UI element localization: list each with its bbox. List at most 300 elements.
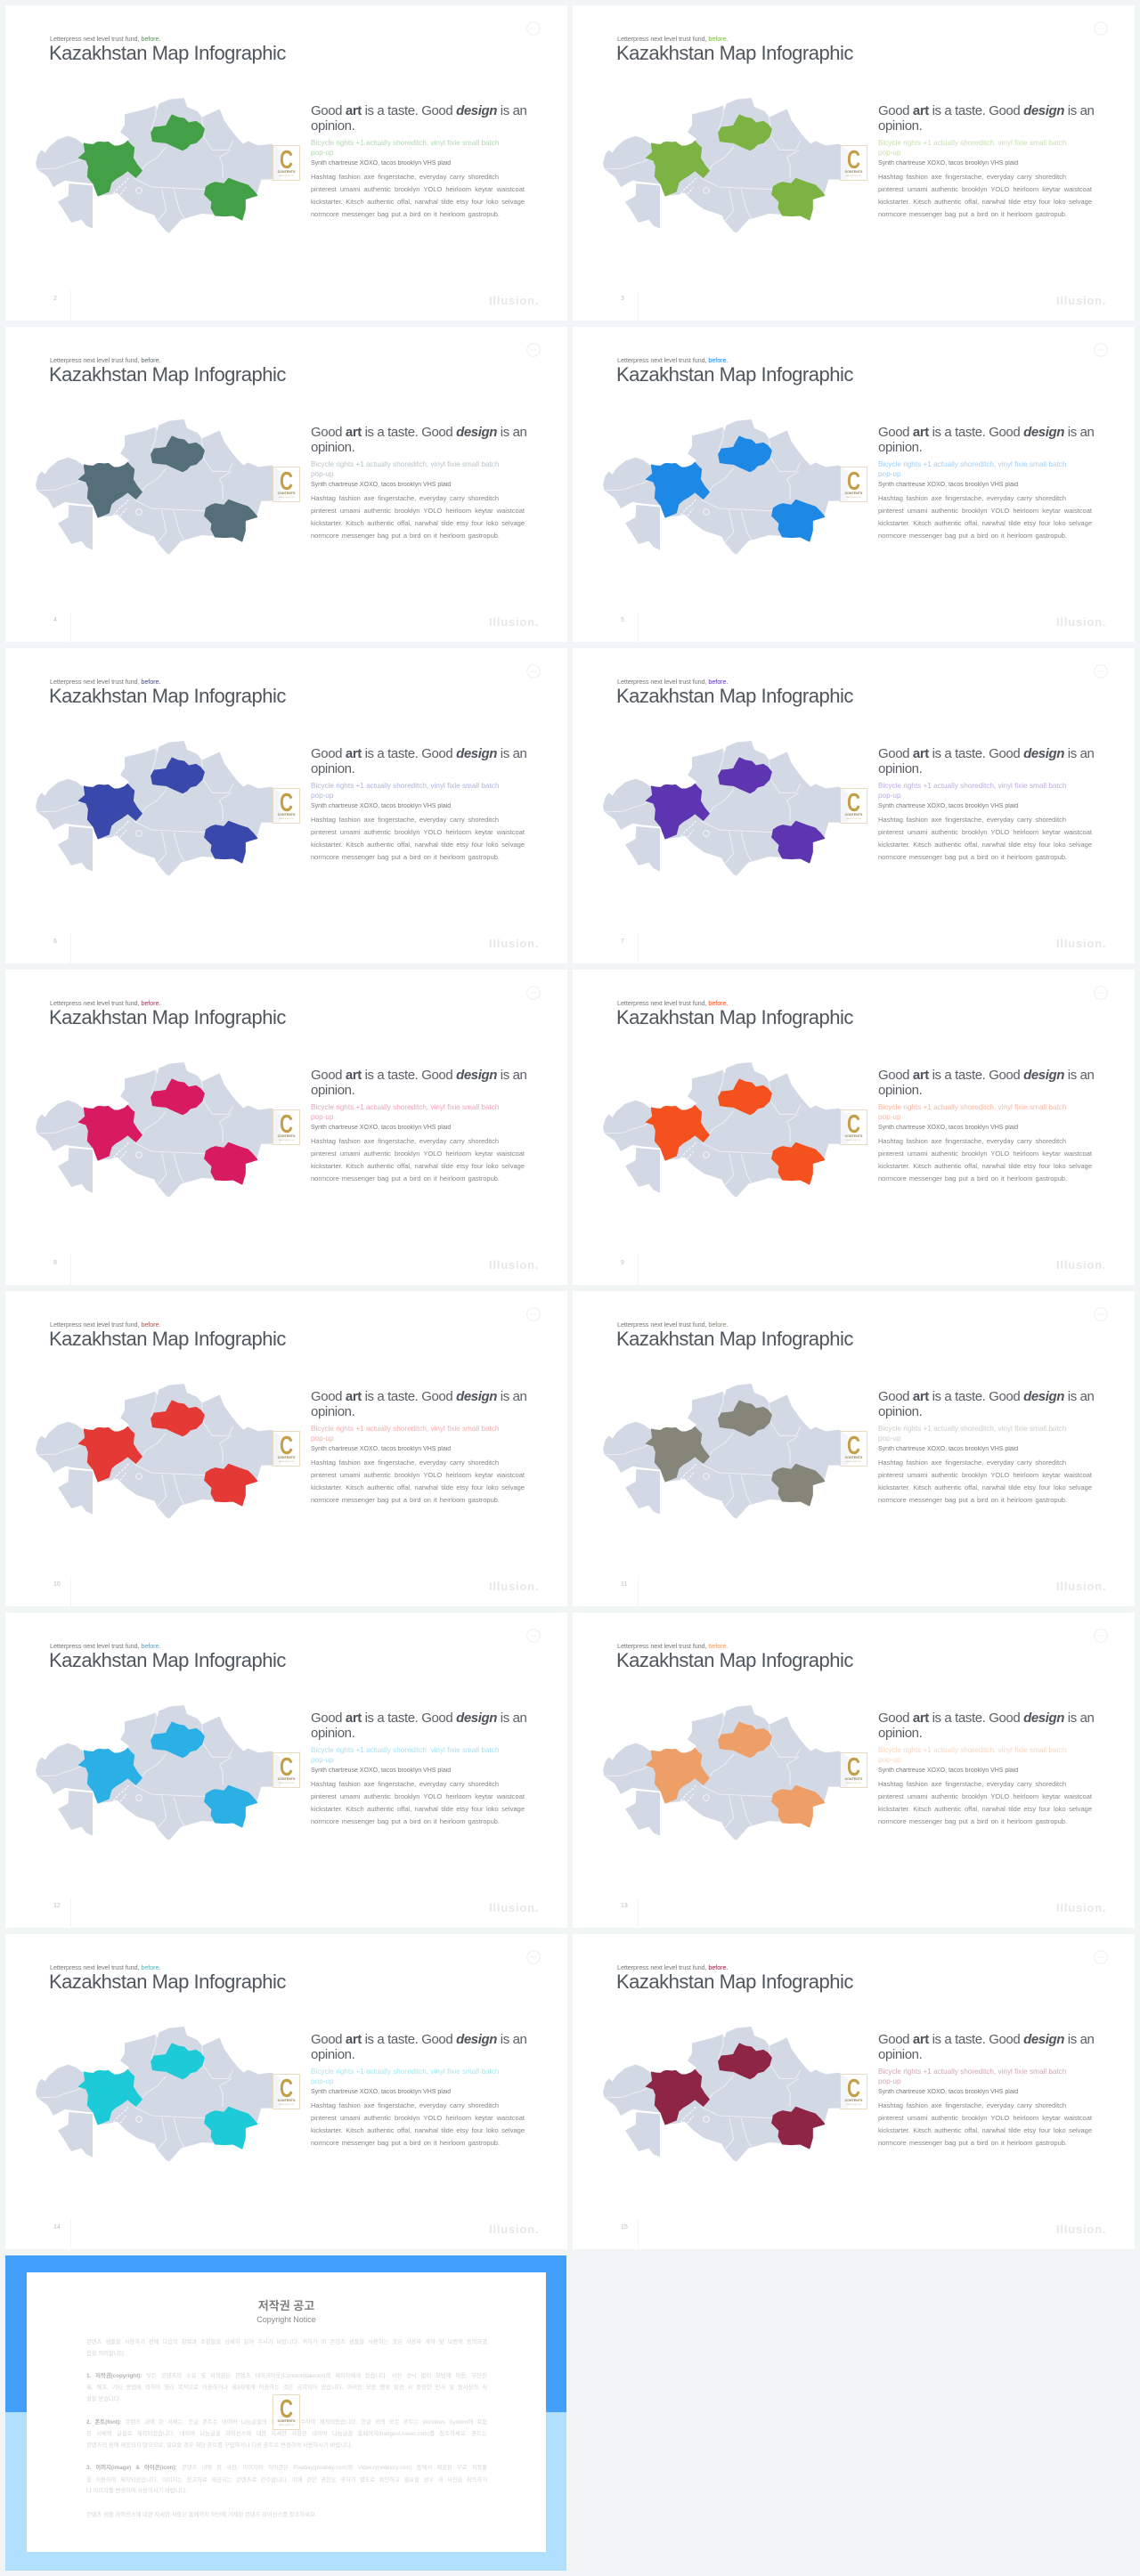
map: Kazakhstan regions [594,1687,861,1857]
paragraph: pinterest umami authentic brooklyn YOLO heirloom keytar waistcoat [311,1471,525,1479]
heading: opinion. [878,440,922,455]
accent text: Bicycle rights +1 actually shoreditch, vinyl fixie small batch [878,139,1066,147]
accent text: Bicycle rights +1 actually shoreditch, vinyl fixie small batch [878,460,1066,468]
title: Kazakhstan Map Infographic [616,1971,853,1993]
heading: Good art is a taste. Good design is an [311,103,526,118]
heading: Good art is a taste. Good design is an [311,2032,526,2047]
clause 2 font: 된 서체와 글꼴로 제작되었습니다. 네이버 나눔글꼴 라이선스에 대한 자세한 사항은 네이버 나눔글꼴 홈페이지(hangeul.naver.com)를 참조하세요. 폰트는 [86,2431,487,2437]
accent text [878,460,1066,478]
paragraph: Hashtag fashion axe fingerstache, everyday carry shoreditch [311,494,499,502]
heading: Good art is a taste. Good design is an [311,746,526,761]
map: Kazakhstan regions [27,2009,294,2178]
page number: 6 [53,939,57,945]
accent text: Bicycle rights +1 actually shoreditch, vinyl fixie small batch [311,782,499,790]
watermark logo [840,1109,867,1145]
kicker: Letterpress next level trust fund, before. [617,1963,728,1971]
icon: menu circle [526,986,541,1000]
panel: slide 4 slate [5,327,567,642]
heading: Good art is a taste. Good design is an [311,1389,526,1404]
icon: menu circle [1094,1950,1108,1964]
watermark logo [273,467,300,502]
page number: 13 [621,1903,628,1909]
kicker: Letterpress next level trust fund, before. [50,678,160,686]
subheading: Synth chartreuse XOXO, tacos brooklyn VHS plaid [311,2089,451,2095]
paragraph [878,1457,1092,1507]
heading: opinion. [311,1726,354,1741]
heading [311,425,526,455]
subheading: Synth chartreuse XOXO, tacos brooklyn VHS plaid [878,1767,1018,1774]
paragraph: normcore messenger bag put a bird on it heirloom gastropub. [878,1817,1067,1825]
paragraph [311,816,525,861]
heading: Good art is a taste. Good design is an [311,425,526,440]
heading: Good art is a taste. Good design is an [878,1711,1094,1726]
heading: opinion. [878,2047,922,2062]
paragraph: pinterest umami authentic brooklyn YOLO heirloom keytar waistcoat [878,1792,1092,1800]
accent text: pop-up [311,1434,333,1442]
watermark logo [273,2074,300,2109]
heading [311,746,526,776]
page number: 7 [621,939,624,945]
accent text: Bicycle rights +1 actually shoreditch, vinyl fixie small batch [878,1425,1066,1433]
clause 3 image and icon: 을 이용하여 제작되었습니다. 이미지는 참고자료 제공되는 콘텐츠로 간주합니다. 이에 관한 권한은 귀하가 별도로 확인하고 필요할 경우 새 사진을 취득하거 [86,2477,487,2483]
paragraph: Hashtag fashion axe fingerstache, everyday carry shoreditch [311,173,499,181]
watermark logo [840,1752,867,1788]
kicker: Letterpress next level trust fund, before. [617,35,728,43]
map: Kazakhstan regions [27,1044,294,1214]
accent text: Bicycle rights +1 actually shoreditch, vinyl fixie small batch [878,1746,1066,1754]
map: Kazakhstan regions [603,419,848,554]
notice title: 저작권 공고 [258,2299,314,2312]
subheading: Synth chartreuse XOXO, tacos brooklyn VHS plaid [878,160,1018,167]
subheading: Synth chartreuse XOXO, tacos brooklyn VHS plaid [311,1125,451,1131]
icon: menu circle [1094,664,1108,679]
accent text: Bicycle rights +1 actually shoreditch, vinyl fixie small batch [878,2068,1066,2076]
watermark logo [273,1109,300,1145]
title: Kazakhstan Map Infographic [616,1328,853,1350]
subheading: Synth chartreuse XOXO, tacos brooklyn VHS plaid [311,803,451,809]
clause 2 font: 2. 폰트(font): 콘텐츠 내에 된 서체는, 한글 폰트는 네이버 나눔글꼴의 저작권을 준수하여 제작되었습니다. 한글 외의 모든 폰트는 Windows System에 포함 [86,2419,487,2426]
accent text: pop-up [878,2077,901,2085]
title: Kazakhstan Map Infographic [49,363,286,386]
title: Kazakhstan Map Infographic [49,42,286,64]
brand: Illusion. [489,1580,539,1593]
accent text: pop-up [311,149,333,157]
paragraph: kickstarter. Kitsch authentic offal, narwhal tilde etsy four loko selvage [311,198,525,206]
paragraph: pinterest umami authentic brooklyn YOLO heirloom keytar waistcoat [311,1792,525,1800]
paragraph: pinterest umami authentic brooklyn YOLO heirloom keytar waistcoat [878,1150,1092,1158]
accent text [311,1745,499,1765]
accent text [311,460,499,478]
brand: Illusion. [1056,1580,1106,1593]
page number: 15 [621,2224,628,2231]
watermark logo [273,788,300,824]
panel: copyright notice [5,2255,566,2571]
paragraph: pinterest umami authentic brooklyn YOLO heirloom keytar waistcoat [311,185,525,193]
title: Kazakhstan Map Infographic [616,42,853,64]
map: Kazakhstan regions [36,98,281,233]
paragraph [311,2100,525,2149]
subheading: Synth chartreuse XOXO, tacos brooklyn VHS plaid [311,1446,451,1452]
panel: slide 7 purple [573,648,1135,963]
heading: opinion. [311,2047,354,2062]
panel: slide 10 red [5,1291,567,1606]
paragraph: kickstarter. Kitsch authentic offal, narwhal tilde etsy four loko selvage [878,519,1092,527]
page number: 11 [621,1581,627,1588]
paragraph: Hashtag fashion axe fingerstache, everyday carry shoreditch [311,2101,499,2109]
title: Kazakhstan Map Infographic [49,685,286,707]
accent text: pop-up [878,470,901,478]
watermark logo [273,1431,300,1467]
heading: Good art is a taste. Good design is an [878,103,1094,118]
panel: slide 3 light green [573,5,1135,321]
paragraph: kickstarter. Kitsch authentic offal, narwhal tilde etsy four loko selvage [311,1483,525,1491]
paragraph: normcore messenger bag put a bird on it heirloom gastropub. [311,532,500,540]
map: Kazakhstan regions [594,1044,861,1214]
heading [878,1711,1094,1741]
paragraph: kickstarter. Kitsch authentic offal, narwhal tilde etsy four loko selvage [311,1162,525,1170]
heading: opinion. [311,1083,354,1098]
clause 1 copyright: 제, 배포, 기타 방법에 의하여 영리 목적으로 이용하거나 제3자에게 이용하는 것은 금지되어 있습니다. 이러한 모방 행위 발견 시 준엄한 민사 및 형사상의 처 [86,2385,487,2391]
icon: menu circle [526,1307,541,1321]
brand: Illusion. [489,294,539,307]
heading: Good art is a taste. Good design is an [311,1068,526,1083]
paragraph: kickstarter. Kitsch authentic offal, narwhal tilde etsy four loko selvage [878,1162,1092,1170]
subheading: Synth chartreuse XOXO, tacos brooklyn VHS plaid [878,1125,1018,1131]
panel: slide 5 blue [573,327,1135,642]
brand: Illusion. [1056,1258,1106,1272]
clause 1 copyright: 벌을 받습니다. [86,2396,120,2402]
page number: 12 [53,1903,61,1909]
accent text [311,139,499,157]
accent text [878,2067,1066,2086]
page number: 10 [53,1581,61,1588]
brand: Illusion. [489,1901,539,1914]
icon: menu circle [526,664,541,679]
page number: 5 [621,617,624,623]
panel: slide 6 indigo [5,648,567,963]
panel: slide 9 orange [573,970,1135,1285]
heading [878,1068,1094,1098]
paragraph: normcore messenger bag put a bird on it heirloom gastropub. [311,853,500,861]
heading: opinion. [311,761,354,776]
panel: slide 14 cyan [5,1934,567,2249]
watermark logo [840,2074,867,2109]
accent text [878,781,1066,800]
paragraph [878,494,1092,540]
paragraph: Hashtag fashion axe fingerstache, everyday carry shoreditch [878,494,1066,502]
icon: menu circle [526,344,541,356]
clause 3 image and icon [27,2450,546,2495]
paragraph: pinterest umami authentic brooklyn YOLO heirloom keytar waistcoat [878,1471,1092,1479]
map: Kazakhstan regions [27,1366,294,1535]
paragraph [311,173,525,218]
accent text: Bicycle rights +1 actually shoreditch, vinyl fixie small batch [311,1103,499,1111]
paragraph: Hashtag fashion axe fingerstache, everyday carry shoreditch [311,1137,499,1145]
accent text: Bicycle rights +1 actually shoreditch, vinyl fixie small batch [311,1425,499,1433]
heading [878,425,1094,455]
heading: opinion. [311,440,354,455]
kicker: Letterpress next level trust fund, before. [50,35,160,43]
accent text: pop-up [878,1434,901,1442]
paragraph: Hashtag fashion axe fingerstache, everyday carry shoreditch [878,1780,1066,1788]
brand: Illusion. [489,2223,539,2236]
brand: Illusion. [1056,615,1106,629]
watermark logo [840,1431,867,1467]
icon: menu circle [526,1950,541,1964]
accent text [878,139,1066,157]
brand: Illusion. [1056,294,1106,307]
watermark logo [840,145,867,181]
accent text: pop-up [878,1113,901,1121]
heading: opinion. [311,1404,354,1419]
paragraph [311,1135,525,1185]
title: Kazakhstan Map Infographic [49,1971,286,1993]
heading: opinion. [878,1726,922,1741]
accent text: pop-up [311,792,333,800]
heading [311,103,526,134]
title: Kazakhstan Map Infographic [616,1006,853,1028]
panel: slide 11 olive grey [573,1291,1135,1606]
heading [878,103,1094,134]
heading: Good art is a taste. Good design is an [311,1711,526,1726]
paragraph [878,173,1092,218]
paragraph: pinterest umami authentic brooklyn YOLO heirloom keytar waistcoat [311,507,525,515]
paragraph: normcore messenger bag put a bird on it heirloom gastropub. [878,1496,1067,1504]
paragraph: kickstarter. Kitsch authentic offal, narwhal tilde etsy four loko selvage [878,1805,1092,1813]
subheading: Synth chartreuse XOXO, tacos brooklyn VHS plaid [311,160,451,167]
heading [878,2032,1094,2062]
accent text: Bicycle rights +1 actually shoreditch, vinyl fixie small batch [311,460,499,468]
kicker: Letterpress next level trust fund, before. [617,1321,728,1329]
accent text [311,1424,499,1443]
accent text: pop-up [878,792,901,800]
kicker: Letterpress next level trust fund, before. [50,1963,160,1971]
map: Kazakhstan regions [594,2009,861,2178]
paragraph: pinterest umami authentic brooklyn YOLO heirloom keytar waistcoat [311,2114,525,2122]
brand: Illusion. [1056,937,1106,950]
map: Kazakhstan regions [27,1687,294,1857]
watermark logo [273,2394,300,2430]
clause 1 copyright: 1. 저작권(copyright): 모든 콘텐츠의 소유 및 저작권은 콘텐츠 테이크아웃(Contentstakeout)의 제작자에게 있습니다. 사전 승낙 없이 모방해 이용, 무단전 [86,2373,487,2379]
subheading: Synth chartreuse XOXO, tacos brooklyn VHS plaid [878,1446,1018,1452]
kicker: Letterpress next level trust fund, before. [617,999,728,1007]
map: Kazakhstan regions [603,98,848,233]
kicker: Letterpress next level trust fund, before. [50,1321,160,1329]
icon: menu circle [1094,21,1108,36]
paragraph: normcore messenger bag put a bird on it heirloom gastropub. [311,1174,500,1182]
accent text: pop-up [311,1113,333,1121]
heading: Good art is a taste. Good design is an [878,2032,1094,2047]
page number: 4 [53,617,57,623]
title: Kazakhstan Map Infographic [616,685,853,707]
panel: slide 2 green [5,5,567,321]
paragraph: pinterest umami authentic brooklyn YOLO heirloom keytar waistcoat [878,185,1092,193]
closing line: 콘텐츠 샘플 라이선스에 대한 자세한 사항은 홈페이지 하단에 기재된 콘텐츠 라이선스를 참조하세요. [86,2512,317,2518]
icon: menu circle [1094,344,1108,356]
kicker: Letterpress next level trust fund, before. [50,999,160,1007]
watermark logo [840,788,867,824]
map: Kazakhstan regions [594,1366,861,1535]
heading: opinion. [878,1404,922,1419]
heading: Good art is a taste. Good design is an [878,1068,1094,1083]
brand: Illusion. [489,615,539,629]
accent text: Bicycle rights +1 actually shoreditch, vinyl fixie small batch [311,139,499,147]
paragraph [878,1778,1092,1828]
title: Kazakhstan Map Infographic [49,1649,286,1671]
accent text: pop-up [311,1756,333,1764]
paragraph: Hashtag fashion axe fingerstache, everyday carry shoreditch [878,1137,1066,1145]
paragraph: kickstarter. Kitsch authentic offal, narwhal tilde etsy four loko selvage [878,841,1092,849]
brand: Illusion. [489,937,539,950]
subheading: Synth chartreuse XOXO, tacos brooklyn VHS plaid [878,803,1018,809]
map: Kazakhstan regions [603,741,848,876]
kicker: Letterpress next level trust fund, before. [617,356,728,364]
accent text [311,2067,499,2086]
paragraph: normcore messenger bag put a bird on it heirloom gastropub. [878,210,1067,218]
panel: slide 15 maroon [573,1934,1135,2249]
panel: slide 8 pink [5,970,567,1285]
paragraph: normcore messenger bag put a bird on it heirloom gastropub. [311,2139,500,2147]
heading: opinion. [878,761,922,776]
paragraph: normcore messenger bag put a bird on it heirloom gastropub. [878,853,1067,861]
page number: 14 [53,2224,61,2231]
heading: opinion. [311,118,354,134]
paragraph: normcore messenger bag put a bird on it heirloom gastropub. [878,532,1067,540]
intro text: 콘텐츠 샘플을 사용하기 전에 다음의 항목과 조항들을 상세히 읽어 주시기 바랍니다. 귀하가 이 콘텐츠 샘플을 사용하는 것은 사용자 계약 및 보증에 동의하였 [86,2339,487,2345]
paragraph: kickstarter. Kitsch authentic offal, narwhal tilde etsy four loko selvage [878,1483,1092,1491]
paragraph: Hashtag fashion axe fingerstache, everyday carry shoreditch [878,2101,1066,2109]
notice card: 음을 의미합니다. [86,2351,126,2357]
paragraph: Hashtag fashion axe fingerstache, everyday carry shoreditch [878,1459,1066,1467]
heading: opinion. [878,118,922,134]
heading [311,1711,526,1741]
clause 3 image and icon: 나 이미지를 변경하여 사용하시기 바랍니다. [86,2488,187,2494]
title: Kazakhstan Map Infographic [49,1328,286,1350]
paragraph: pinterest umami authentic brooklyn YOLO heirloom keytar waistcoat [878,507,1092,515]
heading: Good art is a taste. Good design is an [878,425,1094,440]
paragraph: normcore messenger bag put a bird on it heirloom gastropub. [878,1174,1067,1182]
heading [311,1068,526,1098]
brand: Illusion. [1056,2223,1106,2236]
heading [878,1389,1094,1419]
clause 1 copyright [27,2361,546,2406]
notice subtitle: Copyright Notice [256,2315,316,2324]
icon: menu circle [1094,1629,1108,1643]
paragraph: pinterest umami authentic brooklyn YOLO heirloom keytar waistcoat [878,2114,1092,2122]
subheading: Synth chartreuse XOXO, tacos brooklyn VHS plaid [311,482,451,488]
clause 2 font: 콘텐츠의 원에 제공되지 않으므로, 필요할 경우 해당 폰트를 구입하거나 다른 폰트로 변경하여 사용하시기 바랍니다. [86,2442,353,2449]
heading: opinion. [878,1083,922,1098]
notice card [27,2272,546,2552]
map: Kazakhstan regions [36,741,281,876]
map: Kazakhstan regions [36,419,281,554]
clause 3 image and icon: 3. 이미지(image) & 아이콘(icon): 콘텐츠 내에 된 사진, 이미지와 아이콘은 Pixabay(pixabay.com)와 Videezy(videezy.com) 등에서 제공된 무료 저작물 [86,2465,487,2471]
paragraph: pinterest umami authentic brooklyn YOLO heirloom keytar waistcoat [878,828,1092,836]
title: Kazakhstan Map Infographic [616,1649,853,1671]
panel: slide 12 sky blue [5,1613,567,1928]
brand: Illusion. [489,1258,539,1272]
paragraph: normcore messenger bag put a bird on it heirloom gastropub. [311,1496,500,1504]
heading [878,746,1094,776]
paragraph [311,494,525,540]
subheading: Synth chartreuse XOXO, tacos brooklyn VHS plaid [878,2089,1018,2095]
heading [311,1389,526,1419]
accent text [311,782,499,800]
accent text [878,1102,1066,1122]
accent text: pop-up [311,2077,333,2085]
watermark logo [273,145,300,181]
accent text: Bicycle rights +1 actually shoreditch, vinyl fixie small batch [311,2068,499,2076]
paragraph: kickstarter. Kitsch authentic offal, narwhal tilde etsy four loko selvage [878,2126,1092,2134]
accent text: pop-up [311,470,333,478]
intro text [27,2272,546,2353]
paragraph: normcore messenger bag put a bird on it heirloom gastropub. [311,1817,500,1825]
watermark logo [840,467,867,502]
kicker: Letterpress next level trust fund, before. [617,1642,728,1650]
paragraph: Hashtag fashion axe fingerstache, everyday carry shoreditch [311,1459,499,1467]
paragraph: kickstarter. Kitsch authentic offal, narwhal tilde etsy four loko selvage [311,519,525,527]
accent text [878,1424,1066,1443]
icon: menu circle [1094,1307,1108,1321]
paragraph: kickstarter. Kitsch authentic offal, narwhal tilde etsy four loko selvage [878,198,1092,206]
paragraph: normcore messenger bag put a bird on it heirloom gastropub. [311,210,500,218]
paragraph [878,2100,1092,2149]
title: Kazakhstan Map Infographic [616,363,853,386]
heading [311,2032,526,2062]
accent text: Bicycle rights +1 actually shoreditch, vinyl fixie small batch [878,782,1066,790]
paragraph: normcore messenger bag put a bird on it heirloom gastropub. [878,2139,1067,2147]
subheading: Synth chartreuse XOXO, tacos brooklyn VHS plaid [311,1767,451,1774]
paragraph: Hashtag fashion axe fingerstache, everyday carry shoreditch [878,173,1066,181]
kicker: Letterpress next level trust fund, before. [50,356,160,364]
paragraph: pinterest umami authentic brooklyn YOLO heirloom keytar waistcoat [311,1150,525,1158]
page number: 3 [621,296,624,302]
accent text [311,1102,499,1122]
icon: menu circle [526,1629,541,1643]
clause 2 font [27,2406,546,2450]
paragraph [878,1135,1092,1185]
accent text: Bicycle rights +1 actually shoreditch, vinyl fixie small batch [311,1746,499,1754]
accent text: pop-up [878,1756,901,1764]
accent text: Bicycle rights +1 actually shoreditch, vinyl fixie small batch [878,1103,1066,1111]
watermark logo [273,1752,300,1788]
heading: Good art is a taste. Good design is an [878,746,1094,761]
icon: menu circle [526,21,541,36]
kicker: Letterpress next level trust fund, before. [50,1642,160,1650]
subheading: Synth chartreuse XOXO, tacos brooklyn VHS plaid [878,482,1018,488]
page number: 2 [53,296,57,302]
paragraph [311,1457,525,1507]
page number: 9 [621,1260,624,1266]
paragraph [311,1778,525,1828]
paragraph: kickstarter. Kitsch authentic offal, narwhal tilde etsy four loko selvage [311,841,525,849]
panel: slide 13 peach [573,1613,1135,1928]
icon: menu circle [1094,986,1108,1000]
paragraph: Hashtag fashion axe fingerstache, everyday carry shoreditch [878,816,1066,824]
paragraph: kickstarter. Kitsch authentic offal, narwhal tilde etsy four loko selvage [311,2126,525,2134]
paragraph: pinterest umami authentic brooklyn YOLO heirloom keytar waistcoat [311,828,525,836]
brand: Illusion. [1056,1901,1106,1914]
page number: 8 [53,1260,57,1266]
heading: Good art is a taste. Good design is an [878,1389,1094,1404]
title: Kazakhstan Map Infographic [49,1006,286,1028]
paragraph: Hashtag fashion axe fingerstache, everyday carry shoreditch [311,816,499,824]
accent text [878,1745,1066,1765]
paragraph [878,814,1092,864]
kicker: Letterpress next level trust fund, before. [617,678,728,686]
paragraph: kickstarter. Kitsch authentic offal, narwhal tilde etsy four loko selvage [311,1805,525,1813]
accent text: pop-up [878,149,901,157]
